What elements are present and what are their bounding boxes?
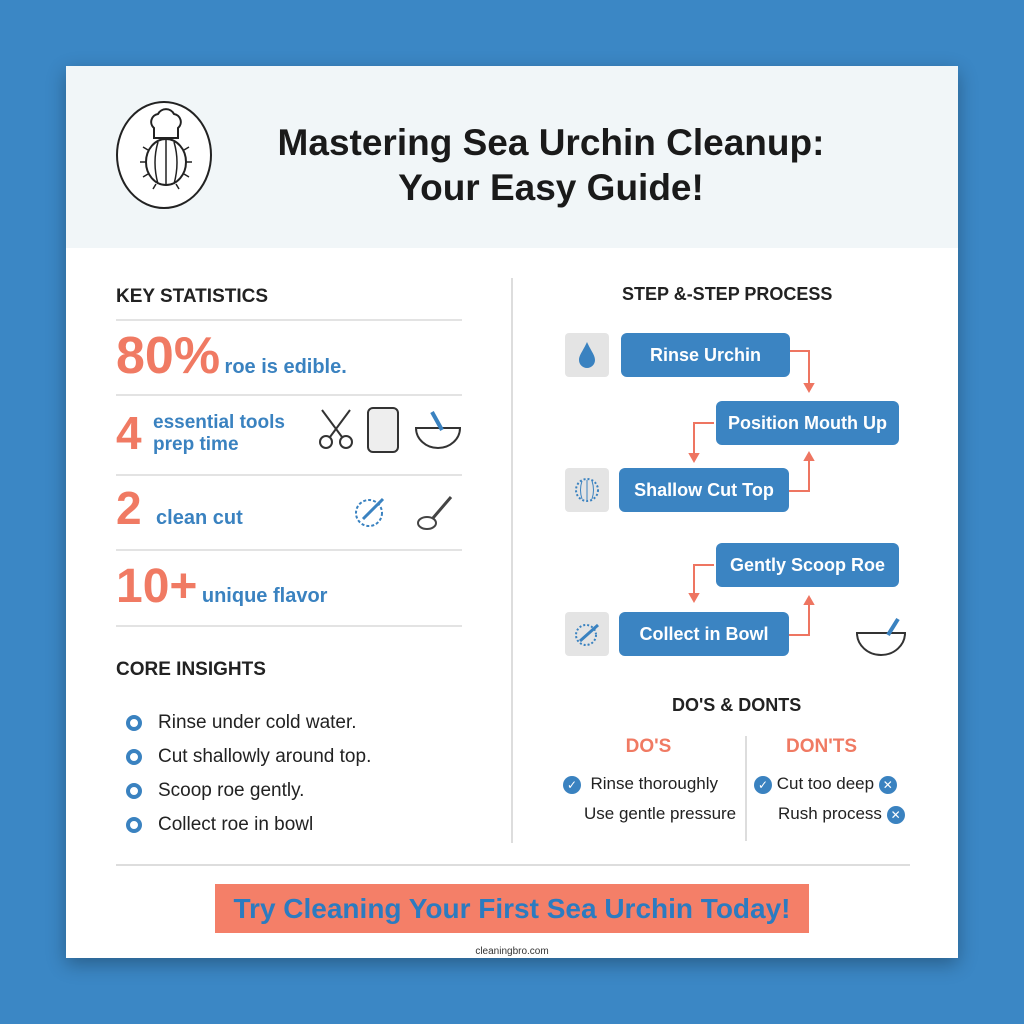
panel: do's and don'ts bbox=[563, 695, 905, 841]
panel: key statistics bbox=[116, 286, 462, 627]
insight list: Scoop roe gently. bbox=[158, 780, 304, 801]
do's column: DO'S bbox=[626, 736, 671, 757]
step: position: Position Mouth Up bbox=[728, 412, 887, 432]
title: Mastering Sea Urchin Cleanup: bbox=[278, 122, 824, 163]
don'ts column: Rush process bbox=[778, 804, 882, 823]
don'ts column: DON'TS bbox=[786, 736, 857, 757]
panel: core insights bbox=[116, 659, 371, 835]
step: rinse: Rinse Urchin bbox=[650, 344, 761, 364]
step: shallow cut bbox=[619, 468, 789, 512]
step: shallow cut: Shallow Cut Top bbox=[634, 480, 774, 500]
stat 4 tools: 4 bbox=[116, 407, 142, 459]
icons: scissors, board, bowl bbox=[319, 407, 461, 453]
step: scoop bbox=[716, 543, 899, 587]
icon: bowl bbox=[857, 619, 905, 655]
insight list bbox=[126, 712, 371, 835]
stat 80%: 80% roe is edible. bbox=[116, 327, 347, 385]
heading: step process: STEP &-STEP PROCESS bbox=[622, 284, 832, 304]
insight list: Collect roe in bowl bbox=[158, 814, 313, 835]
insight list: Cut shallowly around top. bbox=[158, 746, 371, 767]
heading: core insights: CORE INSIGHTS bbox=[116, 659, 266, 680]
don'ts column: Cut too deep bbox=[777, 774, 874, 793]
step: scoop: Gently Scoop Roe bbox=[730, 554, 885, 574]
step: collect: Collect in Bowl bbox=[639, 624, 768, 644]
don'ts column: ✕ bbox=[891, 808, 901, 822]
do's column: Rinse thoroughly bbox=[590, 774, 718, 793]
header band bbox=[66, 66, 958, 248]
icon: urchin knife bbox=[565, 612, 609, 656]
stat 10+: 10+ unique flavor bbox=[116, 560, 327, 613]
title: Your Easy Guide! bbox=[398, 167, 704, 208]
don'ts column: ✓ bbox=[758, 778, 768, 792]
heading: key statistics: KEY STATISTICS bbox=[116, 286, 268, 307]
call to action banner: Try Cleaning Your First Sea Urchin Today! bbox=[233, 892, 790, 924]
icon: urchin bbox=[565, 468, 609, 512]
do's column bbox=[563, 736, 736, 823]
stat 2 clean cut bbox=[116, 482, 452, 534]
stat 2 clean cut: 2 clean cut bbox=[116, 482, 243, 534]
heading: dos and donts: DO'S & DONTS bbox=[672, 695, 801, 715]
don'ts column bbox=[754, 736, 905, 824]
do's column: Use gentle pressure bbox=[584, 804, 736, 823]
stat 4 tools bbox=[116, 407, 461, 459]
step: position bbox=[716, 401, 899, 445]
card bbox=[66, 66, 958, 958]
call to action banner bbox=[215, 884, 809, 933]
step: rinse bbox=[621, 333, 790, 377]
stat 4 tools: prep time bbox=[153, 434, 239, 455]
arrows bbox=[688, 350, 906, 656]
footer url: cleaningbro.com bbox=[475, 946, 549, 957]
title bbox=[278, 122, 824, 208]
icon: chef urchin logo bbox=[116, 101, 212, 209]
don'ts column: ✕ bbox=[883, 778, 893, 792]
stat 4 tools: essential tools bbox=[153, 412, 285, 433]
panel: step process bbox=[565, 284, 906, 656]
do's column: ✓ bbox=[567, 778, 577, 792]
insight list: Rinse under cold water. bbox=[158, 712, 357, 733]
icon: water drop bbox=[565, 333, 609, 377]
step: collect bbox=[619, 612, 789, 656]
